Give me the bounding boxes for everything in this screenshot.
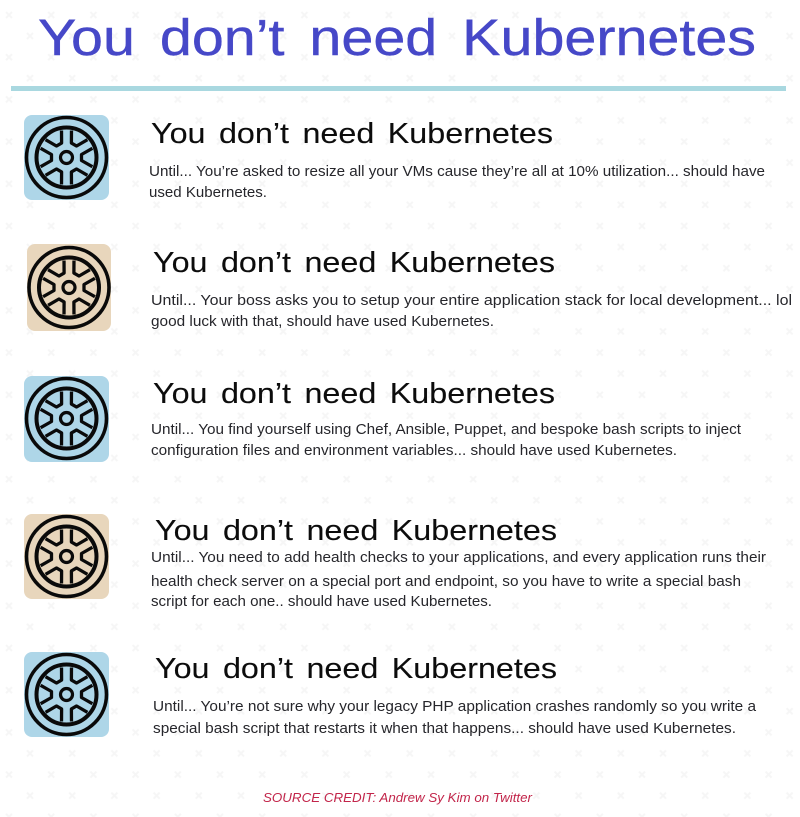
- body 2: [151, 293, 792, 330]
- panel: local development: [27, 244, 792, 331]
- heading 5: You don’t need Kubernetes: [155, 653, 557, 685]
- heading 4: You don’t need Kubernetes: [155, 515, 557, 547]
- heading 3: You don’t need Kubernetes: [153, 378, 555, 410]
- body 5: [153, 699, 757, 737]
- body 4: Until... You need to add health checks to your applications, and every application runs their: [151, 550, 766, 566]
- icon: tan wheel: [27, 244, 111, 331]
- panel: health checks: [24, 514, 766, 610]
- body 4: script for each one.. should have used Kubernetes.: [151, 594, 492, 610]
- body 2: Until... Your boss asks you to setup your entire application stack for local development... lol: [151, 293, 792, 309]
- body 1: used Kubernetes.: [149, 185, 267, 201]
- icon: blue wheel: [24, 376, 109, 462]
- body 1: [149, 164, 765, 201]
- icon: tan wheel: [24, 514, 109, 599]
- heading 2: You don’t need Kubernetes: [153, 247, 555, 279]
- panel: resize VMs: [24, 115, 765, 201]
- body 5: Until... You’re not sure why your legacy PHP application crashes randomly so you write a: [153, 699, 757, 715]
- title: You don’t need Kubernetes: [38, 9, 756, 66]
- icon: blue wheel: [24, 652, 109, 737]
- panel: legacy PHP: [24, 652, 757, 737]
- body 1: Until... You’re asked to resize all your VMs cause they’re all at 10% utilization... should have: [149, 164, 765, 180]
- body 3: [151, 422, 741, 459]
- source credit: SOURCE CREDIT: Andrew Sy Kim on Twitter: [263, 790, 533, 805]
- panel: config tools: [24, 376, 741, 462]
- body 4: health check server on a special port and endpoint, so you have to write a special bash: [151, 574, 741, 590]
- body 2: good luck with that, should have used Kubernetes.: [151, 314, 494, 330]
- body 5: special bash script that restarts it when that happens... should have used Kubernetes.: [153, 721, 736, 737]
- icon: blue wheel: [24, 115, 109, 200]
- body 3: Until... You find yourself using Chef, Ansible, Puppet, and bespoke bash scripts to inject: [151, 422, 741, 438]
- heading 1: You don’t need Kubernetes: [151, 118, 553, 150]
- body 4: [151, 550, 766, 610]
- body 3: configuration files and environment variables... should have used Kubernetes.: [151, 443, 677, 459]
